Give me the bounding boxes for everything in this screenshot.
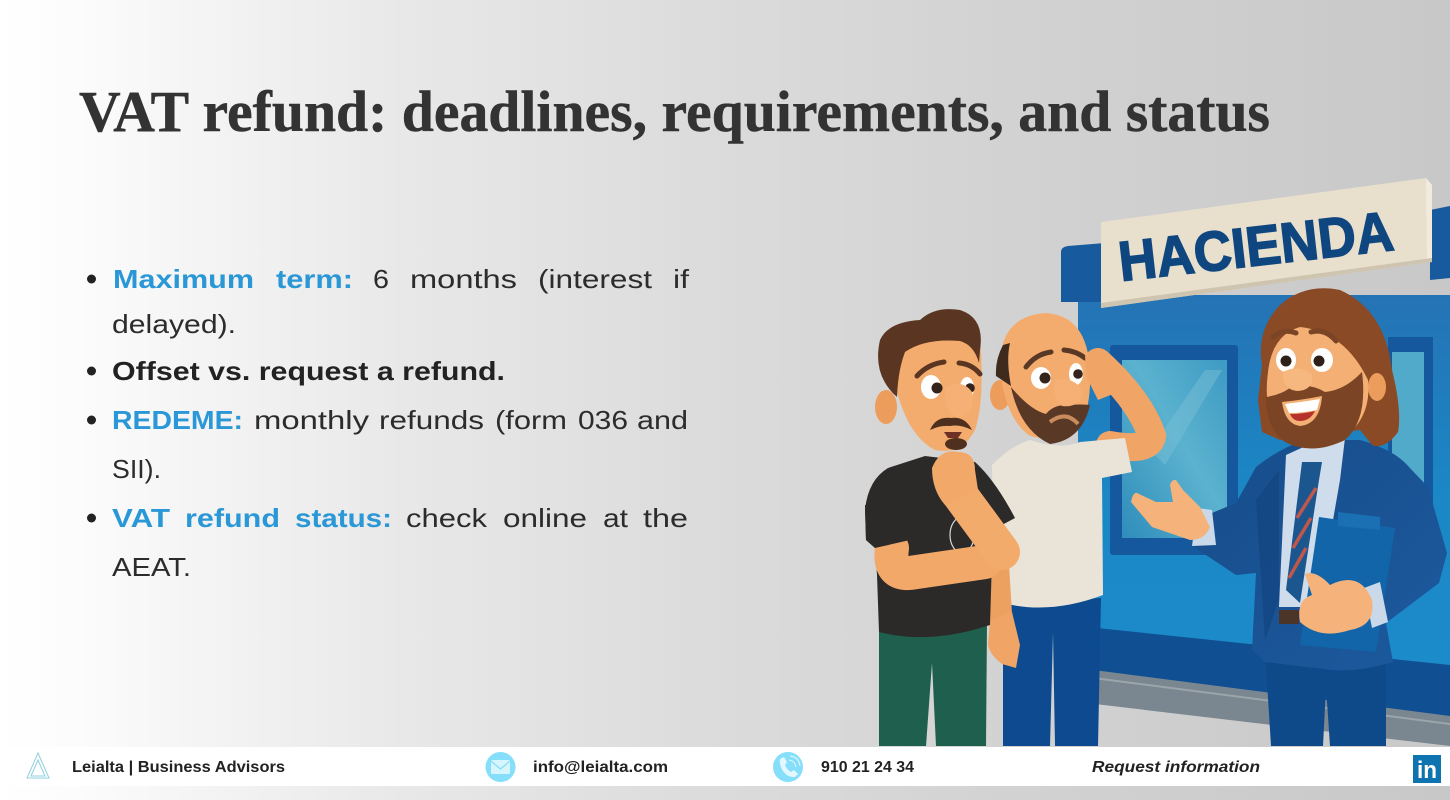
shirt <box>1279 438 1345 607</box>
base band <box>1078 626 1450 720</box>
bullet: VAT refund status: refund <box>185 503 280 533</box>
bullet: maximum term: months <box>410 264 517 294</box>
bullet: REDEME: SII). <box>112 454 161 484</box>
person: advisor in suit <box>1131 288 1447 746</box>
raised arm <box>1098 362 1152 447</box>
footer bar <box>0 747 1450 786</box>
bullet: maximum term: delayed). <box>112 309 236 339</box>
goatee <box>945 438 967 450</box>
arms <box>891 548 985 573</box>
bullet: maximum term: term: <box>276 264 353 294</box>
clipboard <box>1300 512 1395 652</box>
bullet: VAT refund status: the <box>643 503 688 533</box>
jeans <box>1003 598 1101 746</box>
bullet: VAT refund status: AEAT. <box>112 552 191 582</box>
call to action: Request information <box>1092 759 1260 776</box>
person: man with moustache <box>865 309 1015 746</box>
bullet: VAT refund status <box>87 503 688 582</box>
window left <box>1110 345 1238 555</box>
bullet: maximum term: (interest <box>538 264 653 294</box>
bullet: VAT refund status: status: <box>295 503 392 533</box>
bullet: REDEME: REDEME: <box>112 405 243 435</box>
illustration: tax office scene <box>865 178 1450 746</box>
head <box>1258 288 1399 449</box>
green trousers <box>879 622 987 746</box>
bullet: maximum term: if <box>673 264 690 294</box>
hanging arm <box>998 565 1002 630</box>
logo: triangle <box>27 753 49 778</box>
fist at chin <box>932 451 978 505</box>
bullet: VAT refund status: at <box>603 503 629 533</box>
person: bald man <box>988 313 1152 746</box>
suit jacket <box>1191 440 1447 670</box>
bullet: REDEME: 036 <box>578 405 628 435</box>
white shirt <box>992 438 1132 608</box>
bullet: VAT refund status: online <box>503 503 587 533</box>
bullet: VAT refund status: check <box>406 503 488 533</box>
left sleeve <box>865 505 910 548</box>
email address: info@leialta.com <box>533 759 668 776</box>
title: VAT refund: deadlines, requirements, and status <box>79 79 1270 144</box>
trousers <box>1265 650 1386 746</box>
company name: Leialta | Business Advisors <box>72 759 285 776</box>
cuff and open hand <box>1192 508 1216 546</box>
bullet: maximum term: Maximum <box>113 264 254 294</box>
bullet: VAT refund status: VAT <box>112 503 170 533</box>
black t-shirt <box>865 456 1015 637</box>
tie <box>1286 462 1322 603</box>
head <box>875 309 982 451</box>
bullet list <box>87 264 690 582</box>
bullet: REDEME: (form <box>495 405 567 435</box>
building: Hacienda office <box>1061 178 1450 746</box>
icon: email <box>486 752 516 782</box>
bullet: offset vs refund: Offset vs. request a refund. <box>112 356 505 386</box>
icon: LinkedIn: in <box>1417 757 1437 784</box>
bullet: maximum term <box>87 264 690 339</box>
window right <box>1388 337 1433 567</box>
phone number: 910 21 24 34 <box>821 759 914 776</box>
head <box>990 313 1090 444</box>
bullet: REDEME: monthly <box>254 405 369 435</box>
bullet: REDEME: refunds <box>379 405 484 435</box>
hand on head <box>1085 355 1118 400</box>
bullet: REDEME: and <box>637 405 688 435</box>
icon: phone <box>773 752 803 782</box>
sign board: HACIENDA <box>1115 199 1397 293</box>
sign board <box>1101 178 1432 308</box>
jacket shading <box>1256 470 1279 640</box>
cuff and holding hand <box>1364 582 1388 628</box>
bullet: maximum term: 6 <box>373 264 389 294</box>
bullet: REDEME <box>87 405 688 484</box>
shirt logo <box>950 517 974 553</box>
belt <box>1279 610 1299 624</box>
